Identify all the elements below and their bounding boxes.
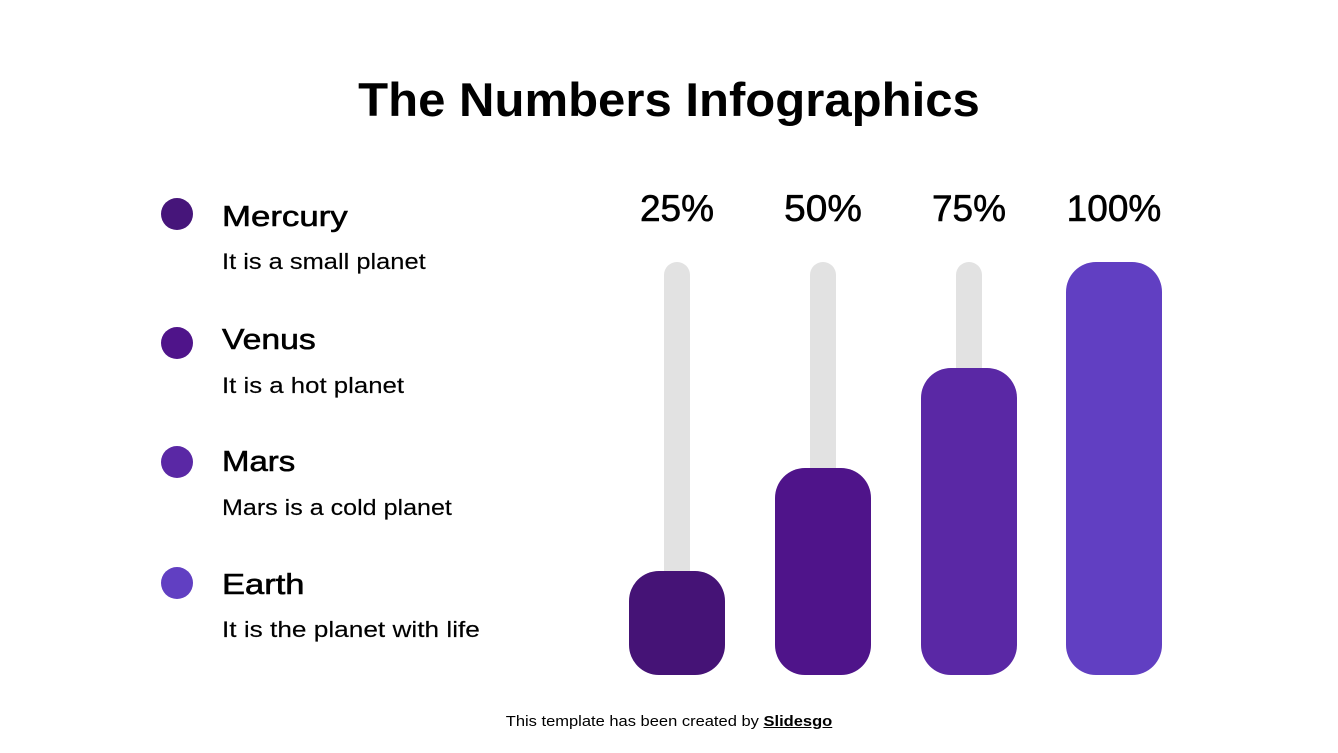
bar track: 75% xyxy=(956,262,982,642)
legend item: Venus: It is a hot planet xyxy=(222,373,404,398)
legend item: Venus: Venus xyxy=(222,324,316,356)
legend item: Mars: Mars is a cold planet xyxy=(222,495,452,520)
bar track: 25% xyxy=(664,262,690,642)
percentage label: 75%: 75% xyxy=(932,188,1006,229)
legend xyxy=(161,198,480,642)
legend item: Earth: Earth xyxy=(222,569,305,601)
legend item: Mercury: Mercury xyxy=(222,201,348,233)
legend item: Mercury xyxy=(161,198,426,274)
legend item: Mars: Mars xyxy=(222,446,295,478)
bar: 25% xyxy=(629,571,725,675)
bar: 100% xyxy=(1066,262,1162,675)
bar track: 50% xyxy=(810,262,836,642)
percentage label: 25%: 25% xyxy=(640,188,714,229)
bar chart xyxy=(629,188,1162,675)
legend item: Venus xyxy=(161,324,404,398)
footer credit: This template has been created by Slidesgo xyxy=(506,713,832,730)
legend item: Mercury: It is a small planet xyxy=(222,249,426,274)
bar: 75% xyxy=(921,368,1017,675)
legend item: Earth: It is the planet with life xyxy=(222,617,480,642)
legend item: Earth xyxy=(161,567,480,642)
bar: 50% xyxy=(775,468,871,675)
percentage label: 50%: 50% xyxy=(784,188,862,229)
legend item: Mars xyxy=(161,446,452,520)
percentage label: 100%: 100% xyxy=(1067,188,1161,229)
title: The Numbers Infographics xyxy=(358,73,980,126)
